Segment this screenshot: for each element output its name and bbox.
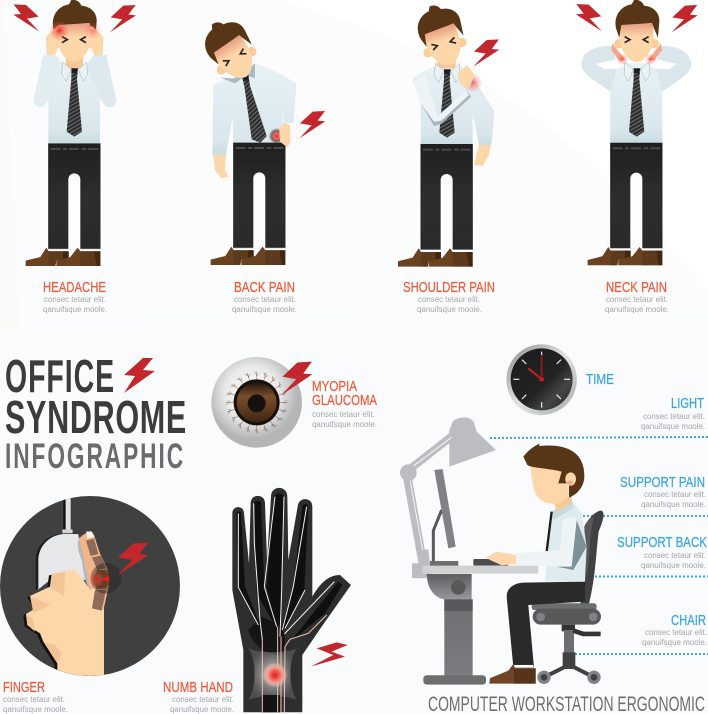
man holding shoulder	[398, 0, 499, 267]
title: INFOGRAPHIC	[5, 437, 185, 476]
label: neck pain: consec tetaur elit.	[606, 295, 668, 304]
label: light: qanuifsque moole.	[641, 422, 705, 431]
label: neck pain: NECK PAIN	[606, 279, 667, 296]
figure: back pain	[195, 11, 325, 314]
label: numb hand	[163, 679, 234, 714]
label: shoulder pain: consec tetaur elit.	[418, 295, 480, 304]
label: support pain	[620, 474, 706, 509]
panel: computer workstation	[400, 344, 708, 714]
man with hands behind neck	[576, 0, 698, 265]
label: shoulder pain: SHOULDER PAIN	[403, 279, 495, 296]
illustration: seated man	[486, 443, 587, 684]
man bending with hand on hip	[195, 11, 325, 265]
label: shoulder pain	[403, 279, 495, 314]
label: chair: qanuifsque moole.	[642, 638, 707, 647]
label: light	[641, 395, 705, 431]
icon: clock	[506, 344, 577, 415]
label: support back	[617, 534, 707, 570]
title: SYNDROME	[5, 391, 187, 443]
label: back pain: qanuifsque moole.	[232, 305, 297, 314]
label: neck pain	[605, 279, 669, 314]
label: finger: FINGER	[3, 679, 45, 696]
label: headache: qanuifsque moole.	[43, 305, 107, 314]
label: support back: consec tetaur elit.	[644, 551, 706, 560]
panel: finger	[0, 495, 180, 714]
label: back pain	[232, 279, 297, 314]
label: back pain: BACK PAIN	[234, 279, 295, 296]
figure: neck pain	[576, 0, 698, 314]
label: finger: consec tetaur elit.	[3, 695, 65, 704]
icon: eyeball	[211, 357, 312, 448]
label: chair	[642, 612, 707, 647]
label: finger	[3, 679, 68, 714]
title: OFFICE	[5, 350, 115, 402]
illustration: computer and desk	[422, 469, 538, 685]
label: support back: qanuifsque moole.	[641, 561, 706, 570]
label: numb hand: qanuifsque moole.	[170, 705, 234, 714]
label: numb hand: NUMB HAND	[163, 679, 233, 696]
panel: eye	[211, 357, 377, 448]
label: neck pain: qanuifsque moole.	[605, 305, 669, 314]
title	[5, 350, 187, 476]
label: chair: consec tetaur elit.	[645, 628, 707, 637]
label: support pain: consec tetaur elit.	[644, 490, 706, 499]
label: headache: consec tetaur elit.	[44, 295, 106, 304]
label: support pain: qanuifsque moole.	[641, 500, 706, 509]
illustration: hand on mouse	[0, 495, 180, 677]
label: numb hand: consec tetaur elit.	[172, 695, 234, 704]
figure: shoulder pain	[398, 0, 499, 314]
label: shoulder pain: qanuifsque moole.	[417, 305, 482, 314]
label: headache	[43, 279, 107, 314]
illustration: chair	[532, 511, 604, 684]
label: finger: qanuifsque moole.	[3, 705, 68, 714]
label: myopia glaucoma: GLAUCOMA	[312, 392, 377, 409]
icon: title lightning bolt	[124, 358, 155, 393]
figure: headache	[13, 0, 136, 314]
label: myopia glaucoma: qanuifsque moole.	[312, 420, 377, 429]
panel: numb hand	[163, 488, 351, 714]
label: headache: HEADACHE	[43, 279, 106, 296]
label: back pain: consec tetaur elit.	[234, 295, 296, 304]
label: myopia glaucoma	[312, 378, 377, 429]
label: myopia glaucoma: consec tetaur elit.	[312, 410, 375, 419]
illustration: hand x-ray	[232, 488, 351, 712]
label: myopia glaucoma: MYOPIA	[312, 378, 357, 395]
label: time: TIME	[586, 371, 614, 388]
illustration: lamp	[400, 417, 496, 578]
man with hands on temples	[13, 0, 136, 266]
label: light: consec tetaur elit.	[643, 412, 705, 421]
